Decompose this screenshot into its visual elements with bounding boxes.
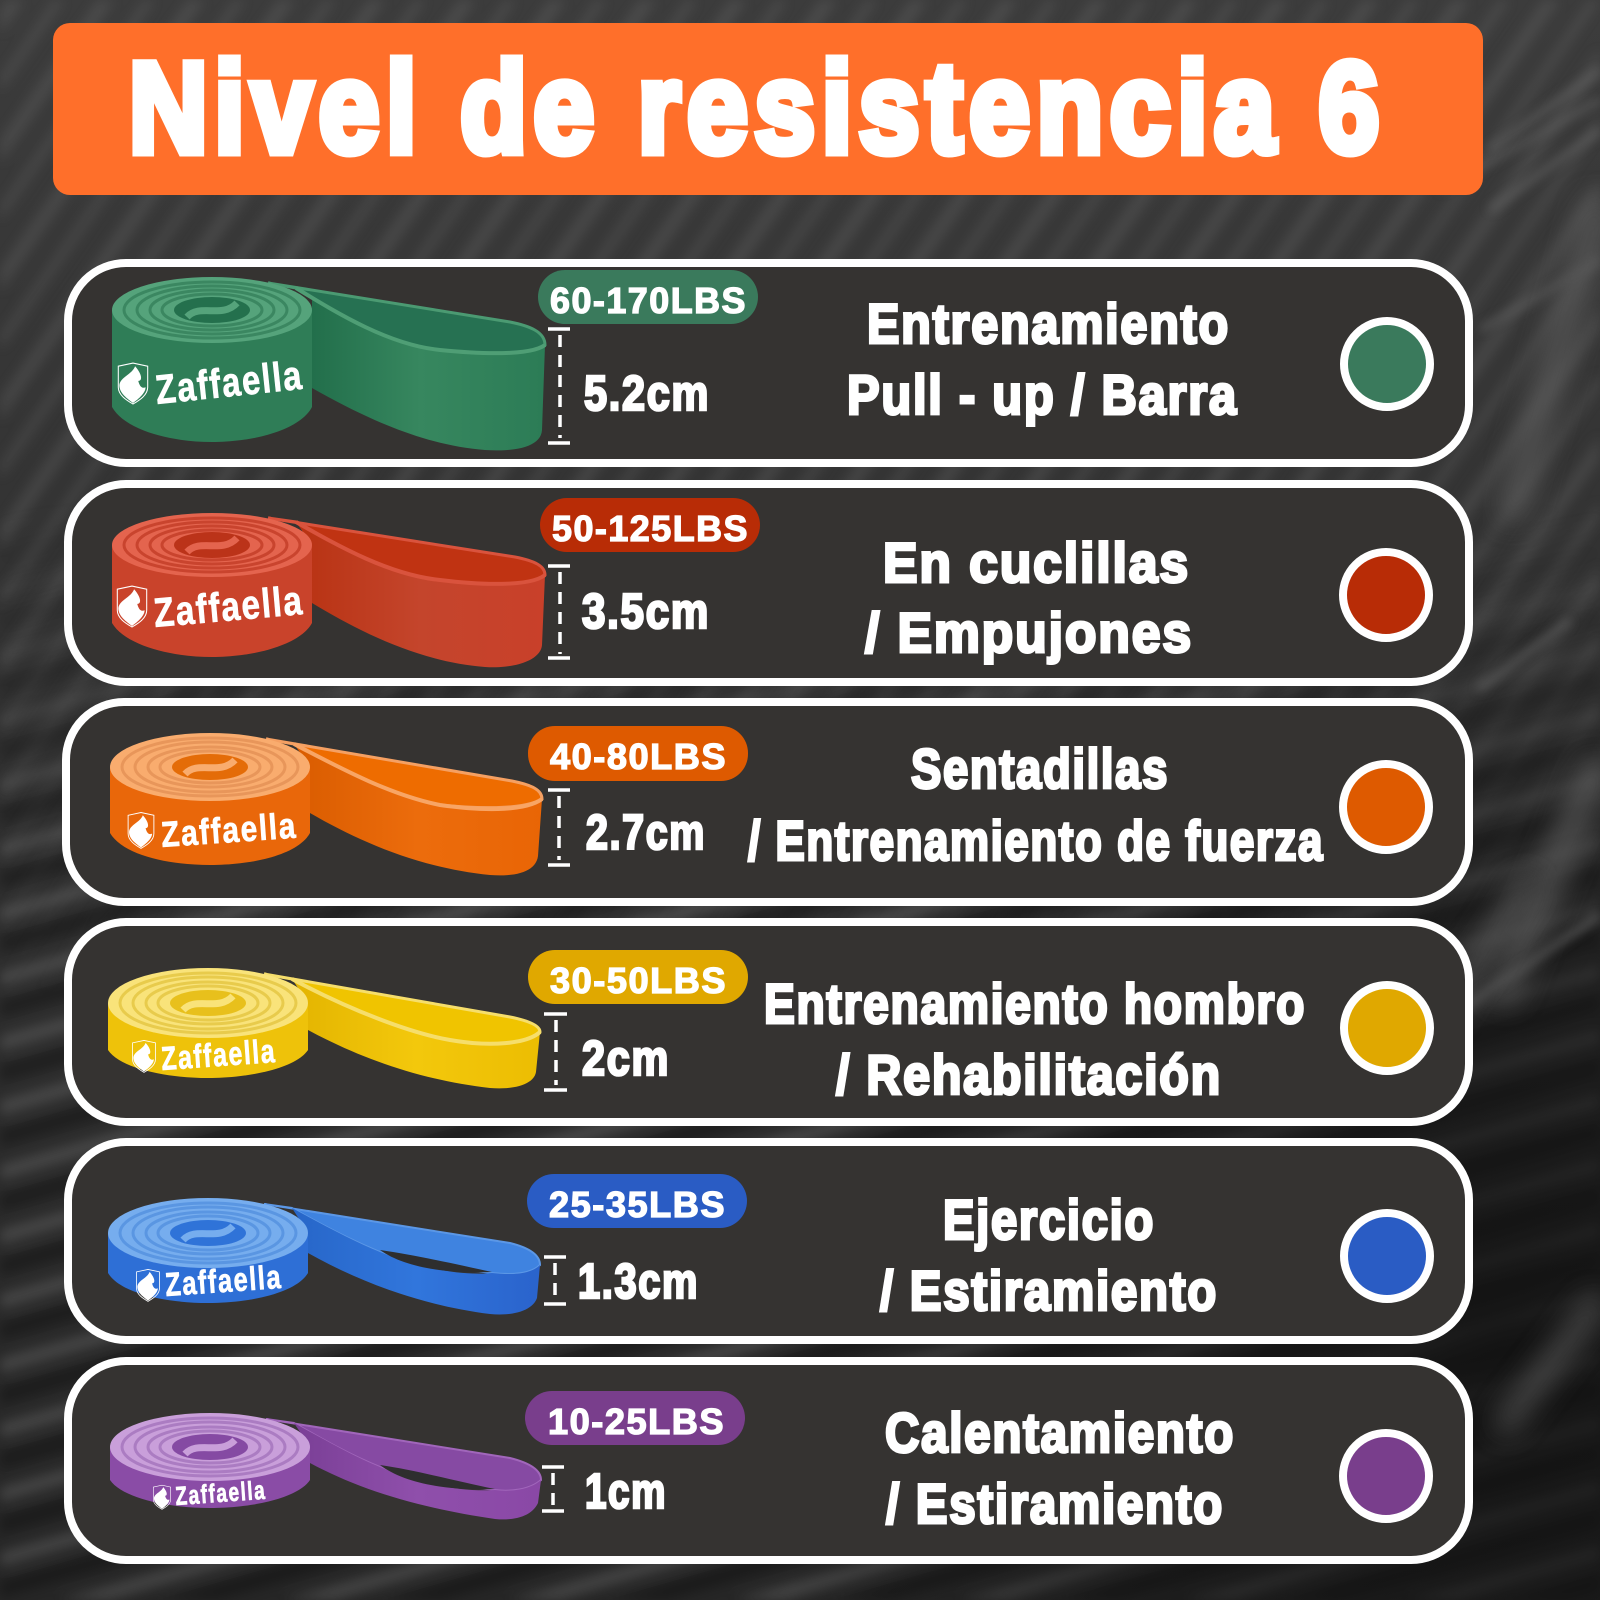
width measure <box>548 790 706 865</box>
panel: red band 50-125LBS <box>68 484 1469 682</box>
weight pill: 10-25LBS <box>548 1401 725 1442</box>
exercise label: / Entrenamiento de fuerza <box>748 809 1324 872</box>
width measure: 1cm <box>585 1465 667 1519</box>
logo <box>153 1475 267 1511</box>
exercise label: / Empujones <box>865 601 1193 664</box>
icon: yellow band <box>108 968 540 1088</box>
logo: Zaffaella <box>152 577 305 636</box>
icon: red band <box>112 513 545 667</box>
exercise label <box>847 292 1238 426</box>
title banner <box>53 23 1483 195</box>
width measure <box>544 1014 670 1090</box>
panel: green band 60-170LBS <box>68 263 1469 463</box>
slit <box>380 1465 495 1489</box>
colour dot <box>1343 552 1429 638</box>
slit <box>380 1250 492 1272</box>
width measure <box>548 329 710 443</box>
colour dot <box>1343 764 1429 850</box>
icon: blue band <box>108 1198 540 1314</box>
exercise label <box>865 531 1193 664</box>
weight pill <box>528 726 748 781</box>
width measure: 2cm <box>582 1032 670 1086</box>
logo: Zaffaella <box>164 1258 283 1303</box>
exercise label: En cuclillas <box>883 531 1190 594</box>
logo <box>118 352 305 413</box>
exercise label: Sentadillas <box>911 737 1169 800</box>
logo: Zaffaella <box>174 1475 267 1511</box>
exercise label: Entrenamiento hombro <box>764 972 1306 1035</box>
icon: purple band <box>110 1413 541 1519</box>
colour dot <box>1344 985 1430 1071</box>
logo: Zaffaella <box>160 1032 277 1077</box>
colour dot <box>1344 1213 1430 1299</box>
width measure: 5.2cm <box>584 367 710 421</box>
width measure <box>548 566 710 658</box>
exercise label <box>748 737 1324 872</box>
icon: green band <box>112 277 545 450</box>
weight pill <box>538 270 758 324</box>
panel: purple band 10-25LBS <box>68 1361 1469 1560</box>
exercise label: Ejercicio <box>943 1188 1155 1251</box>
weight pill <box>525 1391 745 1445</box>
width measure <box>542 1465 667 1519</box>
weight pill: 60-170LBS <box>550 280 747 321</box>
weight pill <box>528 950 748 1004</box>
logo <box>117 577 305 636</box>
colour dot <box>1343 1433 1429 1519</box>
width measure: 2.7cm <box>586 806 706 860</box>
logo <box>133 1032 277 1077</box>
weight pill: 50-125LBS <box>552 508 749 549</box>
exercise label: Entrenamiento <box>867 292 1230 355</box>
exercise label <box>880 1188 1218 1322</box>
weight pill: 25-35LBS <box>549 1184 726 1225</box>
logo <box>137 1258 283 1303</box>
exercise label: / Rehabilitación <box>836 1043 1222 1106</box>
title: Nivel de resistencia 6 <box>129 37 1386 180</box>
exercise label <box>885 1401 1235 1535</box>
width measure: 3.5cm <box>582 585 710 639</box>
exercise label: Pull - up / Barra <box>847 363 1238 426</box>
exercise label: Calentamiento <box>885 1401 1235 1464</box>
exercise label: / Estiramiento <box>880 1259 1218 1322</box>
colour dot <box>1344 321 1430 407</box>
logo: Zaffaella <box>153 352 305 413</box>
weight pill <box>527 1174 747 1228</box>
icon: orange band <box>110 733 542 875</box>
exercise label <box>764 972 1306 1106</box>
panel: orange band 40-80LBS <box>66 702 1469 902</box>
exercise label: / Estiramiento <box>886 1472 1224 1535</box>
panel: blue band 25-35LBS <box>68 1142 1469 1340</box>
panel: yellow band 30-50LBS <box>68 922 1469 1122</box>
weight pill: 30-50LBS <box>550 960 727 1001</box>
logo <box>128 805 298 855</box>
weight pill: 40-80LBS <box>550 736 727 777</box>
logo: Zaffaella <box>160 805 298 855</box>
weight pill <box>540 498 760 552</box>
width measure <box>544 1255 699 1309</box>
width measure: 1.3cm <box>578 1255 699 1309</box>
